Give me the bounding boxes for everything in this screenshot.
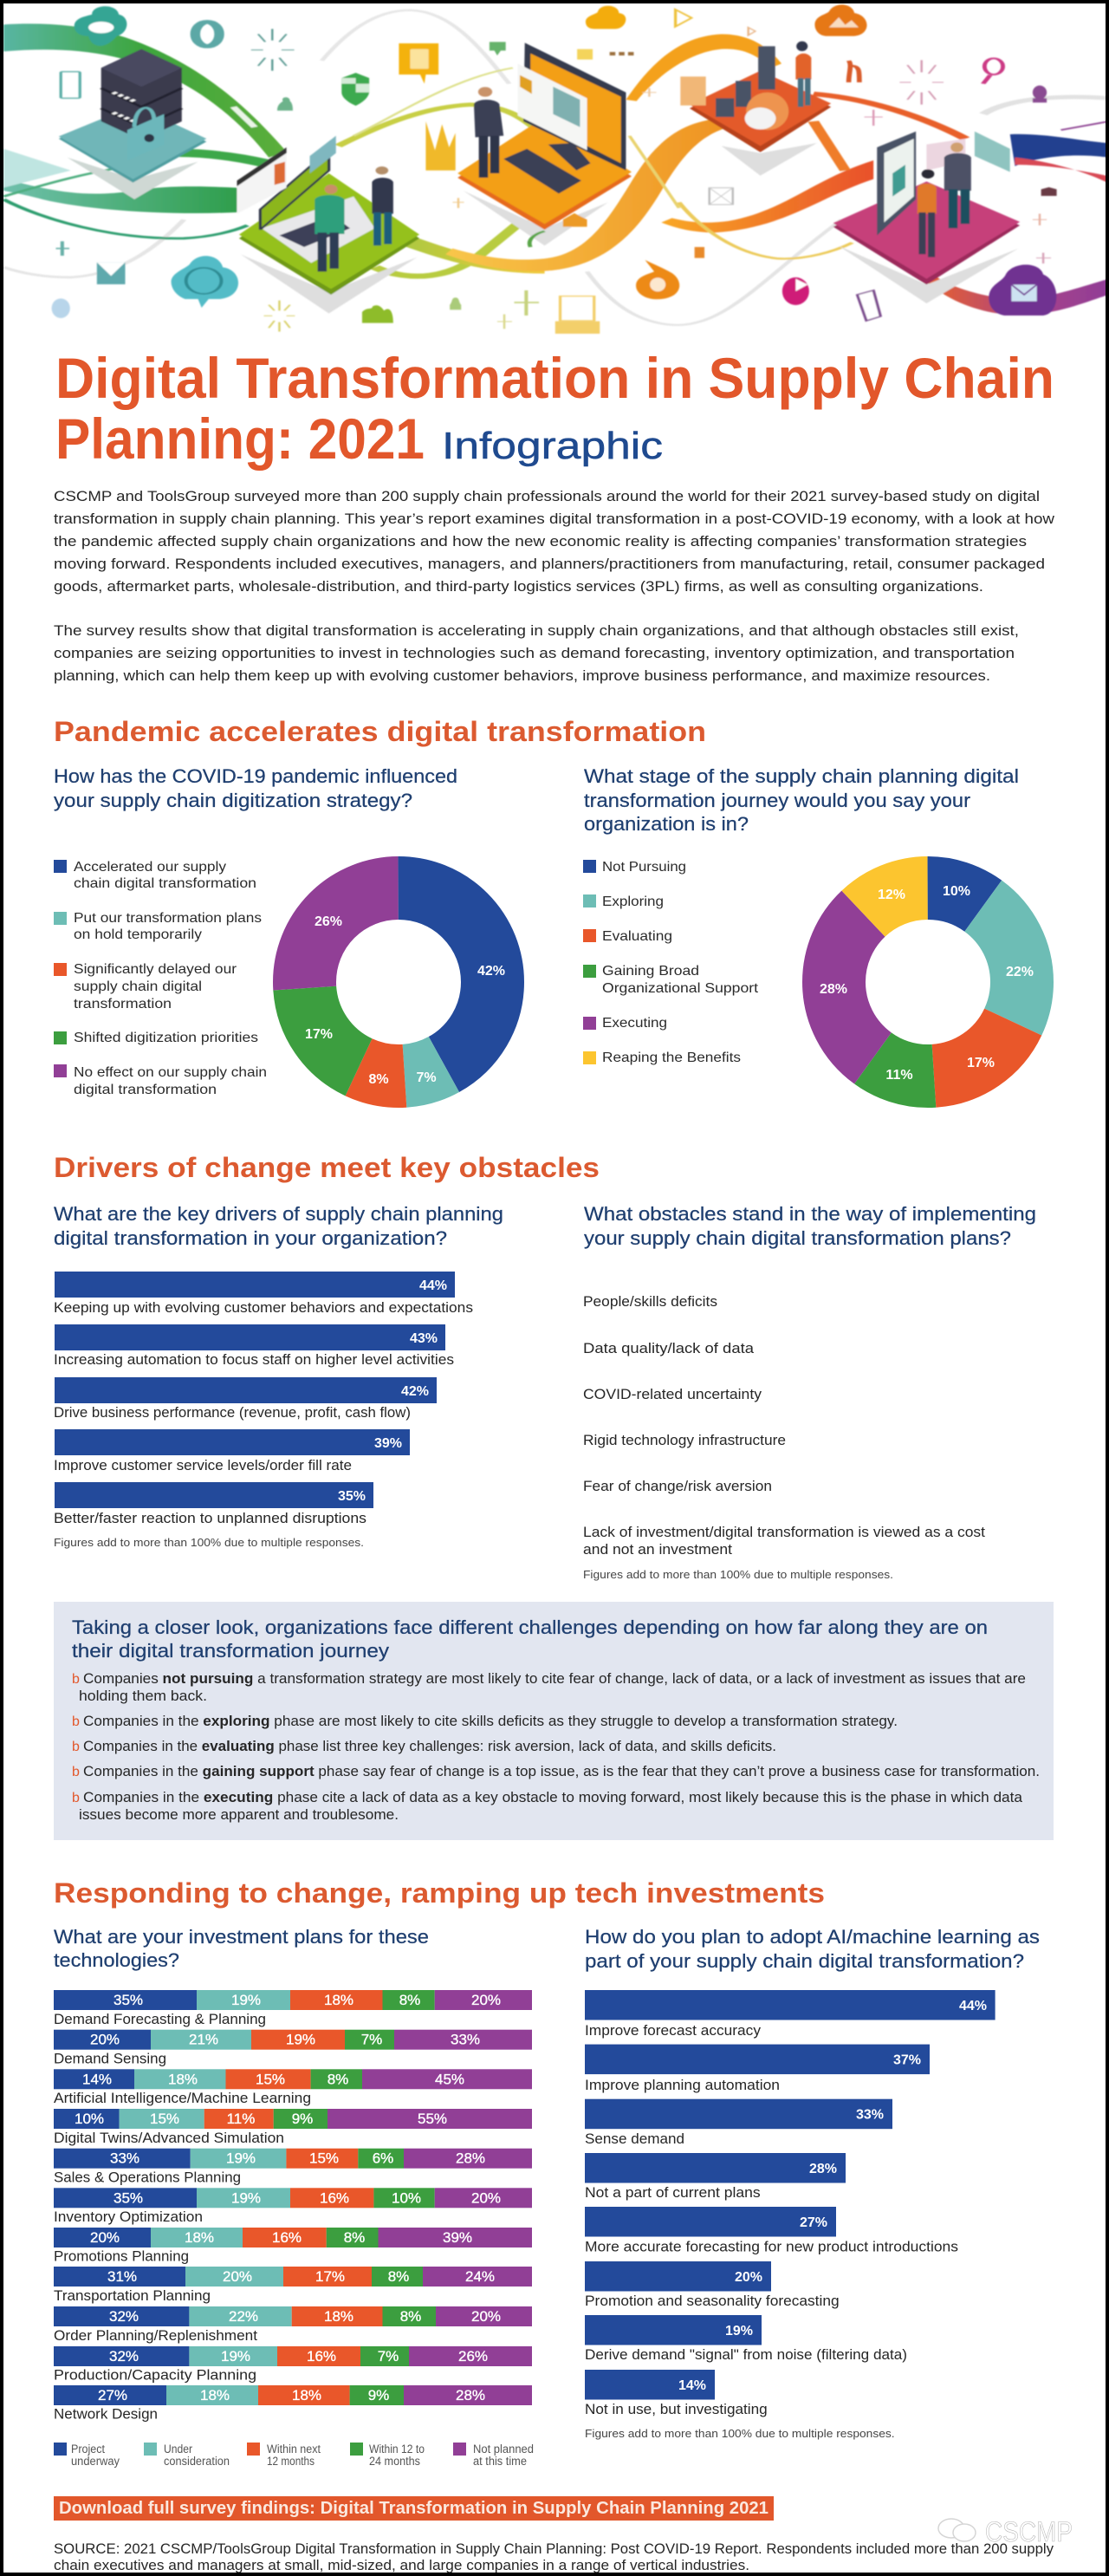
row: demand forecasting: 18% (324, 1992, 353, 2008)
donut chart: journey stage: 28% (820, 982, 847, 997)
row: transportation planning (54, 2267, 532, 2304)
row: demand forecasting: 35% (113, 1992, 143, 2008)
bar chart: ai adoption: 20% (735, 2270, 762, 2285)
row: demand sensing: 7% (361, 2032, 382, 2048)
row: artificial intelligence: 15% (256, 2071, 285, 2087)
row: artificial intelligence: Artificial Intelligence/Machine Learning (54, 2090, 311, 2106)
bar chart: ai adoption: 19% (725, 2324, 753, 2339)
list: obstacles: People/skills deficits (583, 1293, 717, 1310)
legend: investment plans: at this time (473, 2455, 527, 2468)
bar chart: key drivers: Increasing automation to focus staff on higher level activities (54, 1351, 454, 1368)
legend: investment plans: Within 12 to (369, 2443, 425, 2456)
question: key drivers: digital transformation in your organization? (54, 1227, 447, 1249)
ribbons (3, 10, 1109, 325)
row: order planning: 22% (229, 2308, 258, 2325)
question: ai adoption (585, 1926, 1040, 1972)
row: order planning: 32% (109, 2308, 139, 2325)
legend: covid influence: transformation (74, 997, 172, 1012)
question: investment plans: technologies? (54, 1949, 179, 1971)
row: promotions planning: 20% (90, 2229, 120, 2246)
bar chart: ai adoption: Figures add to more than 100% due to multiple responses. (585, 2427, 895, 2440)
row: inventory optimization: Inventory Optimization (54, 2208, 203, 2225)
row: demand sensing: 20% (90, 2032, 120, 2048)
panel: closer look: b (72, 1791, 80, 1805)
legend: covid influence (54, 860, 267, 1097)
question: covid influence (54, 765, 457, 811)
row: network design: Network Design (54, 2406, 158, 2422)
row: order planning: 18% (324, 2308, 353, 2325)
legend: covid influence: digital transformation (74, 1083, 217, 1097)
legend: covid influence: Put our transformation plans (74, 911, 262, 926)
question: obstacles: your supply chain digital transformation plans? (584, 1227, 1011, 1249)
section heading: investments: Responding to change, ramping up tech investments (54, 1877, 825, 1909)
stacked bar chart: technologies (54, 1990, 532, 2422)
bar chart: ai adoption: 28% (809, 2162, 837, 2176)
question: ai adoption: part of your supply chain digital transformation? (585, 1950, 1024, 1972)
bar chart: key drivers: 39% (374, 1436, 402, 1451)
row: inventory optimization: 16% (320, 2189, 349, 2206)
intro paragraph 2: companies are seizing opportunities to invest in technologies such as demand forecasting, inventory optimization, and transportation (54, 645, 1015, 661)
row: sales and operations: 33% (110, 2150, 139, 2167)
row: transportation planning: 31% (107, 2268, 137, 2285)
bar chart: key drivers: 35% (338, 1489, 366, 1504)
row: network design: 27% (98, 2387, 127, 2404)
panel: closer look: b (72, 1740, 80, 1754)
watermark: CSCMP (938, 2516, 1073, 2547)
list: obstacles: COVID-related uncertainty (583, 1386, 762, 1402)
icons: small pictograms (52, 10, 1057, 334)
legend: investment plans: consideration (164, 2455, 230, 2468)
question: covid influence: your supply chain digitization strategy? (54, 790, 412, 811)
legend: investment plans: underway (71, 2455, 120, 2468)
title: Planning: 2021 (55, 407, 425, 471)
row: production capacity: Production/Capacity Planning (54, 2366, 256, 2384)
panel: closer look: Companies in the exploring phase are most likely to cite skills deficits as they struggle to develop a transformation strategy. (83, 1714, 898, 1729)
panel: closer look: their digital transformation journey (72, 1640, 389, 1662)
row: digital twins: Digital Twins/Advanced Simulation (54, 2130, 284, 2146)
list: obstacles (583, 1293, 985, 1581)
panel: closer look: holding them back. (79, 1688, 207, 1704)
panel: closer look: Taking a closer look, organizations face different challenges depending on how far along they are on (72, 1617, 988, 1638)
row: inventory optimization: 19% (231, 2189, 261, 2206)
list: obstacles: and not an investment (583, 1541, 732, 1558)
legend: journey stage: Executing (602, 1016, 667, 1031)
source note (54, 2540, 1054, 2573)
bar chart: key drivers: 44% (419, 1278, 447, 1293)
bar chart: ai adoption: 27% (800, 2215, 827, 2230)
bar chart: ai adoption: Not in use, but investigating (585, 2401, 768, 2417)
panel: closer look: Companies not pursuing a transformation strategy are most likely to cite fear of change, lack of data, or a lack of investment as issues that are (83, 1671, 1026, 1687)
legend: journey stage (583, 860, 759, 1065)
row: promotions planning: 39% (443, 2229, 472, 2246)
bar chart: ai adoption: 37% (893, 2053, 921, 2068)
row: sales and operations (54, 2149, 532, 2185)
row: transportation planning: 20% (223, 2268, 252, 2285)
bar chart: key drivers: 43% (410, 1331, 438, 1346)
legend: investment plans: Project (71, 2443, 105, 2456)
legend: investment plans: 12 months (267, 2455, 315, 2468)
legend: journey stage: Evaluating (602, 929, 672, 944)
question: journey stage (584, 765, 1019, 835)
row: transportation planning: 17% (315, 2268, 345, 2285)
donut chart: covid influence: 26% (315, 914, 342, 929)
intro paragraph 1: CSCMP and ToolsGroup surveyed more than 200 supply chain professionals around the world for their 2021 survey-based study on digital (54, 488, 1040, 504)
red platform with bar charts, pie and person (690, 42, 831, 176)
panel: closer look: b (72, 1714, 80, 1729)
row: production capacity (54, 2346, 532, 2384)
intro paragraph 2: planning, which can help them keep up with evolving customer behaviors, improve business performance, and maximize resources. (54, 667, 990, 684)
donut chart: covid influence: 42% (477, 964, 505, 979)
bar chart: key drivers: 42% (401, 1384, 429, 1399)
bar chart: key drivers: Drive business performance (revenue, profit, cash flow) (54, 1404, 411, 1421)
row: promotions planning: 16% (272, 2229, 302, 2246)
legend: covid influence: supply chain digital (74, 979, 202, 994)
question: journey stage: What stage of the supply chain planning digital (584, 765, 1019, 787)
legend: covid influence: No effect on our supply chain (74, 1065, 267, 1080)
bar chart: ai adoption (585, 1990, 996, 2440)
title: Digital Transformation in Supply Chain (55, 346, 1054, 410)
row: demand forecasting: 19% (231, 1992, 261, 2008)
legend: covid influence: chain digital transformation (74, 876, 256, 891)
row: order planning: 20% (471, 2308, 501, 2325)
row: promotions planning: 18% (185, 2229, 214, 2246)
row: sales and operations: Sales & Operations Planning (54, 2169, 241, 2185)
list: obstacles: Fear of change/risk aversion (583, 1478, 772, 1494)
row: production capacity: 19% (221, 2348, 250, 2365)
list: obstacles: Figures add to more than 100% due to multiple responses. (583, 1568, 893, 1581)
question: investment plans: What are your investment plans for these (54, 1926, 429, 1948)
legend: journey stage: Not Pursuing (602, 860, 686, 875)
donut chart: journey stage: 17% (967, 1056, 995, 1070)
row: transportation planning: 8% (388, 2268, 409, 2285)
intro paragraph 2 (54, 622, 1019, 684)
row: sales and operations: 6% (373, 2150, 393, 2167)
intro paragraph 2: The survey results show that digital transformation is accelerating in supply chain organizations, and that although obstacles still exist, (54, 622, 1019, 639)
panel: closer look: Companies in the evaluating phase list three key challenges: risk aversion, lack of data, and skills deficits. (83, 1739, 776, 1754)
legend: journey stage: Reaping the Benefits (602, 1051, 741, 1065)
donut chart: covid influence: 7% (416, 1070, 437, 1085)
watermark: CSCMP: CSCMP (985, 2516, 1073, 2547)
row: artificial intelligence: 18% (168, 2071, 198, 2087)
row: demand sensing: 21% (189, 2032, 218, 2048)
section heading: pandemic: Pandemic accelerates digital transformation (54, 716, 706, 747)
row: demand forecasting: Demand Forecasting & Planning (54, 2011, 266, 2027)
row: demand forecasting: 20% (471, 1992, 501, 2008)
panel: closer look: Companies in the gaining support phase say fear of change is a top issue, as is the fear that they can’t prove a business case for transformation. (83, 1764, 1040, 1779)
row: order planning: Order Planning/Replenishment (54, 2327, 257, 2344)
row: artificial intelligence: 8% (328, 2071, 348, 2087)
intro paragraph 1: the pandemic affected supply chain organizations and how the new economic reality is affecting companies’ transformation strategies (54, 533, 1027, 550)
bar chart: ai adoption: 44% (959, 1999, 987, 2013)
row: production capacity: 7% (378, 2348, 399, 2365)
intro paragraph 1: transformation in supply chain planning. This year’s report examines digital transformation in a post-COVID-19 economy, with a look at how (54, 511, 1055, 527)
legend: investment plans: Within next (267, 2443, 321, 2456)
row: digital twins: 55% (418, 2111, 447, 2127)
title (55, 346, 1054, 471)
row: production capacity: 16% (307, 2348, 336, 2365)
row: network design: 18% (200, 2387, 230, 2404)
donut chart: journey stage: 22% (1006, 965, 1034, 979)
question: key drivers (54, 1203, 503, 1249)
question: journey stage: transformation journey would you say your (584, 790, 970, 811)
legend: covid influence: Shifted digitization priorities (74, 1031, 258, 1045)
legend: journey stage: Exploring (602, 894, 664, 909)
row: production capacity: 26% (458, 2348, 488, 2365)
source note: chain executives and managers at small, mid-sized, and large companies in a range of vertical industries. (54, 2557, 749, 2573)
legend: investment plans: Not planned (473, 2443, 534, 2456)
row: order planning (54, 2306, 532, 2344)
icons: clouds (75, 4, 1056, 315)
source note: SOURCE: 2021 CSCMP/ToolsGroup Digital Transformation in Supply Chain Planning: Post COVID-19 Report. Respondents included more than 200 supply (54, 2540, 1054, 2557)
bar chart: key drivers: Improve customer service levels/order fill rate (54, 1457, 352, 1473)
donut chart: covid influence: 17% (305, 1027, 333, 1042)
donut chart: journey stage (820, 884, 1034, 1083)
bar chart: ai adoption: Improve planning automation (585, 2077, 780, 2093)
panel: closer look: Companies in the executing phase cite a lack of data as a key obstacle to moving forward, most likely because this is the phase in which data (83, 1790, 1023, 1805)
question: obstacles (584, 1203, 1036, 1249)
bar chart: ai adoption: Derive demand "signal" from noise (filtering data) (585, 2346, 907, 2363)
row: network design: 18% (292, 2387, 321, 2404)
legend: covid influence: on hold temporarily (74, 927, 202, 942)
row: inventory optimization: 20% (471, 2189, 501, 2206)
list: obstacles: Data quality/lack of data (583, 1340, 755, 1356)
question: journey stage: organization is in? (584, 813, 749, 835)
panel: closer look: b (72, 1672, 80, 1687)
row: network design: 9% (368, 2387, 389, 2404)
row: digital twins: 11% (227, 2111, 255, 2127)
panel: closer look (54, 1602, 1054, 1840)
bar chart: ai adoption: More accurate forecasting for new product introductions (585, 2238, 958, 2255)
donut chart: journey stage: 10% (943, 884, 970, 899)
lime platform with laptop and two people (237, 136, 419, 314)
bar chart: key drivers (54, 1272, 473, 1549)
title: Infographic (442, 425, 663, 467)
row: transportation planning: 24% (465, 2268, 495, 2285)
section heading: drivers: Drivers of change meet key obstacles (54, 1152, 600, 1183)
question: key drivers: What are the key drivers of supply chain planning (54, 1203, 503, 1225)
row: sales and operations: 15% (309, 2150, 339, 2167)
row: artificial intelligence: 14% (82, 2071, 112, 2087)
row: transportation planning: Transportation Planning (54, 2287, 211, 2304)
row: inventory optimization (54, 2188, 532, 2225)
row: demand forecasting: 8% (399, 1992, 420, 2008)
legend: journey stage: Organizational Support (602, 981, 759, 996)
legend: investment plans: Under (164, 2443, 192, 2456)
row: promotions planning (54, 2228, 532, 2265)
row: demand sensing: 33% (451, 2032, 480, 2048)
bar chart: ai adoption: 14% (678, 2378, 706, 2393)
legend: investment plans: 24 months (369, 2455, 420, 2468)
row: digital twins: 10% (75, 2111, 104, 2127)
bar chart: key drivers: Better/faster reaction to unplanned disruptions (54, 1510, 366, 1526)
row: promotions planning: 8% (344, 2229, 365, 2246)
donut chart: covid influence (305, 888, 505, 1087)
row: sales and operations: 19% (226, 2150, 256, 2167)
row: digital twins: 9% (292, 2111, 313, 2127)
list: obstacles: Lack of investment/digital transformation is viewed as a cost (583, 1524, 985, 1540)
bar chart: ai adoption: 33% (856, 2108, 884, 2123)
donut chart: journey stage: 11% (885, 1068, 913, 1083)
row: digital twins: 15% (150, 2111, 179, 2127)
bar chart: ai adoption: Promotion and seasonality forecasting (585, 2293, 840, 2309)
row: demand sensing: 19% (286, 2032, 315, 2048)
row: inventory optimization: 10% (392, 2189, 421, 2206)
panel: closer look: issues become more apparent and troublesome. (79, 1807, 399, 1823)
row: demand sensing: Demand Sensing (54, 2051, 166, 2067)
row: demand forecasting (54, 1990, 532, 2027)
row: order planning: 8% (400, 2308, 421, 2325)
bar chart: key drivers: Figures add to more than 100% due to multiple responses. (54, 1536, 364, 1549)
panel: closer look: b (72, 1765, 80, 1779)
icons: sparkle bursts and plus signs (55, 29, 1051, 332)
hero illustration (3, 4, 1109, 334)
bar chart: key drivers: Keeping up with evolving customer behaviors and expectations (54, 1299, 473, 1316)
question: covid influence: How has the COVID-19 pandemic influenced (54, 765, 457, 787)
bar chart: ai adoption: Not a part of current plans (585, 2184, 761, 2201)
row: network design (54, 2385, 532, 2422)
legend: journey stage: Gaining Broad (602, 964, 699, 979)
list: obstacles: Rigid technology infrastructure (583, 1432, 786, 1448)
intro paragraph 1: moving forward. Respondents included executives, managers, and planners/practitioners from manufacturing, retail, consumer packaged (54, 556, 1045, 572)
row: promotions planning: Promotions Planning (54, 2248, 189, 2265)
row: artificial intelligence (54, 2069, 532, 2106)
question: obstacles: What obstacles stand in the way of implementing (584, 1203, 1036, 1225)
row: production capacity: 32% (109, 2348, 139, 2365)
bar chart: ai adoption: Improve forecast accuracy (585, 2022, 762, 2039)
intro paragraph 1: goods, aftermarket parts, wholesale-distribution, and third-party logistics services (3PL) firms, as well as consulting organizations. (54, 578, 983, 595)
row: demand sensing (54, 2030, 532, 2067)
donut chart: journey stage: 12% (878, 888, 905, 902)
teal platform with server stack and lock (59, 49, 206, 199)
legend: covid influence: Significantly delayed our (74, 962, 237, 977)
row: artificial intelligence: 45% (435, 2071, 464, 2087)
magenta platform with tablet and two people (833, 132, 1020, 303)
donut chart: covid influence: 8% (368, 1072, 389, 1087)
row: network design: 28% (456, 2387, 485, 2404)
row: digital twins (54, 2109, 532, 2146)
intro paragraph 1 (54, 488, 1055, 595)
legend: investment plans (54, 2443, 534, 2468)
question: ai adoption: How do you plan to adopt AI/machine learning as (585, 1926, 1040, 1948)
orange platform with monitor, keyboard and person (457, 42, 632, 245)
row: inventory optimization: 35% (113, 2189, 143, 2206)
download banner: Download full survey findings: Digital Transformation in Supply Chain Planning 2021 (59, 2499, 769, 2518)
question: investment plans (54, 1926, 429, 1971)
row: sales and operations: 28% (456, 2150, 485, 2167)
legend: covid influence: Accelerated our supply (74, 860, 226, 875)
bar chart: ai adoption: Sense demand (585, 2130, 684, 2147)
